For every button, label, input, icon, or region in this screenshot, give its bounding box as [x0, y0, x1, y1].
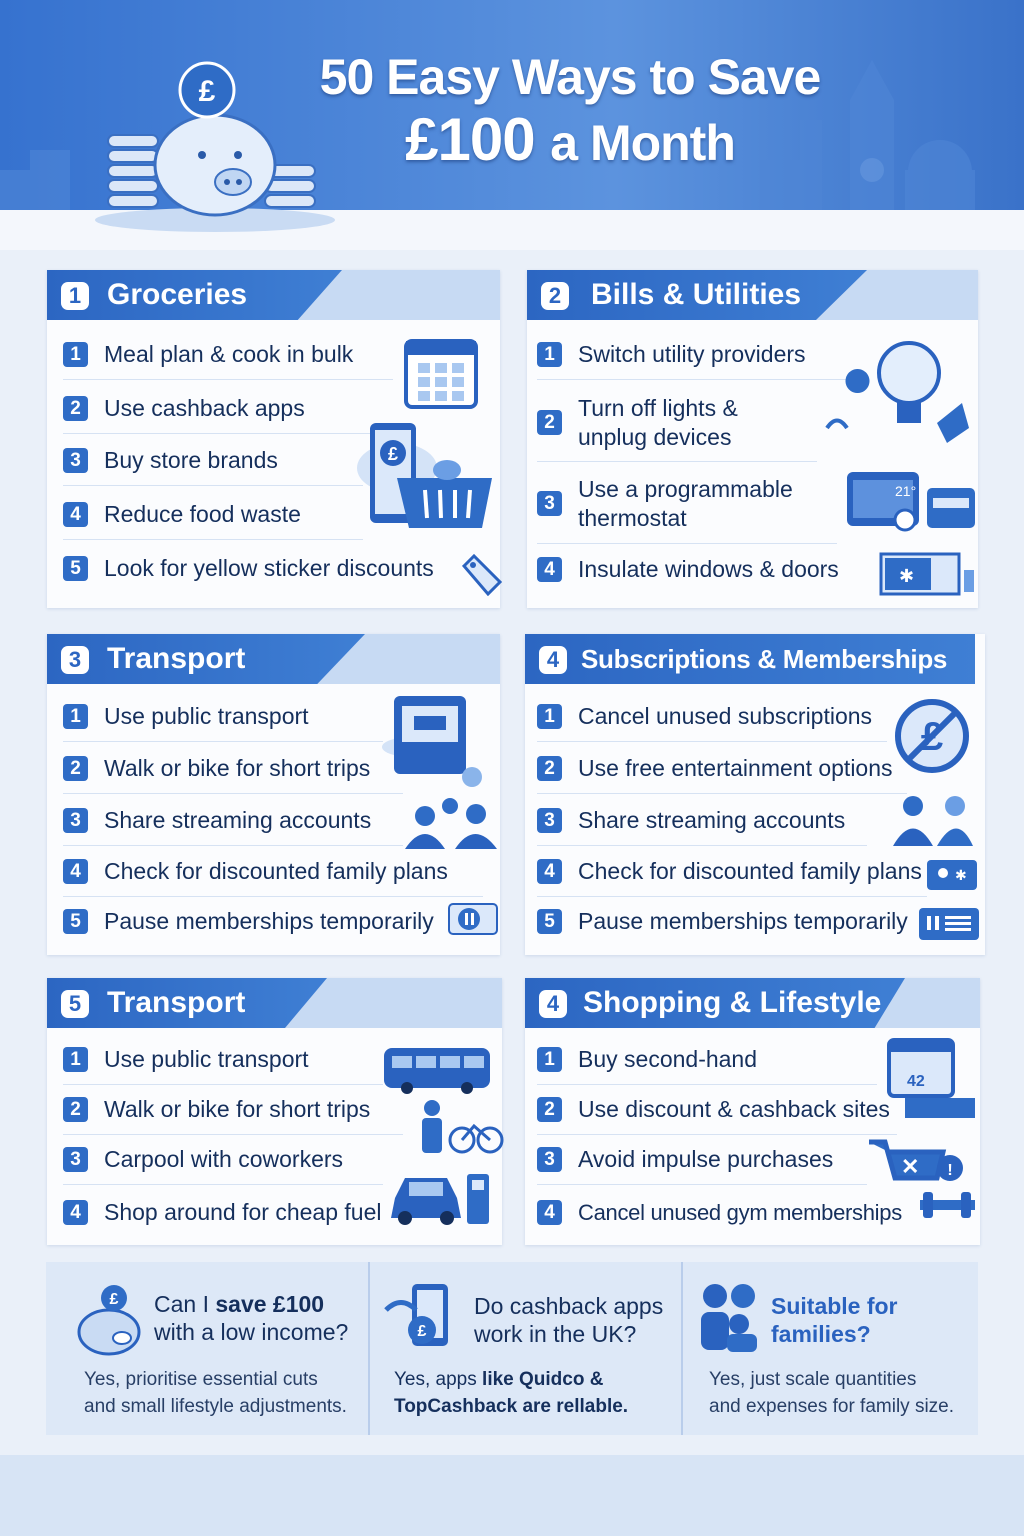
- list: transport: Pause memberships temporarily: [104, 908, 434, 934]
- icon: window: ✱: [899, 566, 914, 586]
- faq 3: and expenses for family size.: [709, 1396, 954, 1417]
- heading: transport 5: Transport: [107, 986, 245, 1019]
- list: transport: Share streaming accounts: [104, 807, 371, 833]
- faq 1: Can I save £100: [154, 1291, 324, 1317]
- list: groceries: 4: [70, 504, 81, 525]
- icon: list: [919, 908, 979, 940]
- icon: person bike: [422, 1100, 504, 1154]
- icon: phone and basket: £: [388, 444, 398, 464]
- list: transport 5: Shop around for cheap fuel: [104, 1198, 381, 1224]
- list: subscriptions: 2: [544, 758, 555, 779]
- list: groceries: 3: [70, 450, 81, 471]
- heading: subscriptions: Subscriptions & Memberships: [581, 644, 947, 674]
- list: subscriptions: Check for discounted family plans: [578, 858, 922, 884]
- panel: subscriptions: [525, 634, 985, 955]
- faq 3: [681, 1262, 978, 1435]
- list: shopping: [537, 1046, 902, 1225]
- list: transport: 5: [70, 910, 81, 932]
- list: transport: Walk or bike for short trips: [104, 755, 370, 781]
- icon: phone: [384, 1284, 448, 1346]
- list: transport 5: Use public transport: [104, 1046, 309, 1072]
- faq 1: and small lifestyle adjustments.: [84, 1396, 347, 1417]
- list: transport 5: 2: [70, 1099, 81, 1120]
- heading: shopping: Shopping & Lifestyle: [583, 986, 881, 1019]
- list: groceries: Buy store brands: [104, 447, 278, 473]
- list: groceries: Look for yellow sticker discounts: [104, 554, 434, 580]
- list: subscriptions: 5: [544, 910, 555, 932]
- list: transport 5: Carpool with coworkers: [104, 1146, 343, 1172]
- list: bills: 1: [544, 344, 555, 365]
- panel: transport: [47, 634, 500, 955]
- faq 2: work in the UK?: [474, 1321, 636, 1347]
- heading: shopping: [525, 978, 980, 1028]
- list: subscriptions: 3: [544, 810, 555, 831]
- icon: id card: ✱: [955, 867, 967, 883]
- list: bills: Turn off lights &: [578, 394, 738, 420]
- list: bills: [537, 341, 846, 582]
- icon: window: [880, 552, 974, 596]
- list: subscriptions: 1: [544, 706, 555, 727]
- list: transport 5: 1: [70, 1049, 81, 1070]
- faq 2: Yes, apps like Quidco &: [394, 1369, 603, 1390]
- list: shopping: 4: [544, 1202, 555, 1222]
- icon: thermostat: [847, 472, 975, 532]
- heading: transport: [47, 634, 500, 684]
- list: bills: Switch utility providers: [578, 341, 806, 367]
- icon: no pound: £: [921, 715, 943, 759]
- icon: phone and basket: [357, 423, 492, 528]
- icon: ticket machine: [382, 696, 482, 787]
- list: transport 5: Walk or bike for short trips: [104, 1096, 370, 1122]
- faq 3: families?: [771, 1321, 871, 1347]
- list: transport: 4: [70, 861, 81, 882]
- heading: groceries: 1: [69, 283, 81, 308]
- faq 1: Yes, prioritise essential cuts: [84, 1369, 318, 1390]
- icon: piggy bank with coins: £: [199, 75, 216, 108]
- faq 2: [368, 1262, 678, 1435]
- list: bills: 3: [544, 493, 555, 514]
- list: bills: 2: [544, 412, 555, 433]
- list: groceries: 5: [70, 558, 81, 578]
- icon: people: [405, 798, 497, 849]
- icon: cart with x: ✕: [901, 1154, 919, 1179]
- icon: cart with x: [869, 1140, 975, 1218]
- icon: no pound: [895, 699, 969, 773]
- heading: groceries: [47, 270, 500, 320]
- list: shopping: Use discount & cashback sites: [578, 1096, 890, 1122]
- icon: price tag: [462, 554, 502, 596]
- icon: phone: £: [418, 1323, 427, 1340]
- heading: shopping: 4: [547, 991, 559, 1016]
- header banner: [0, 0, 1024, 210]
- heading: transport: Transport: [107, 642, 245, 675]
- icon: bus: [384, 1048, 490, 1094]
- list: transport: Check for discounted family plans: [104, 858, 448, 884]
- icon: piggy bank with coins: [95, 62, 335, 232]
- list: groceries: [63, 341, 434, 581]
- light band: [0, 210, 1024, 250]
- list: transport: 1: [70, 706, 81, 727]
- list: shopping: 2: [544, 1099, 555, 1120]
- list: transport 5: [63, 1046, 403, 1225]
- icon: calendar: [404, 339, 478, 409]
- faq 3: Yes, just scale quantities: [709, 1369, 916, 1390]
- icon: cart with x: !: [947, 1162, 953, 1179]
- panel: FAQ: [46, 1262, 978, 1435]
- icon: family: [701, 1284, 757, 1352]
- list: transport 5: 4: [70, 1202, 81, 1222]
- heading: transport: 3: [69, 647, 81, 672]
- faq 2: TopCashback are rellable.: [394, 1396, 628, 1417]
- list: groceries: 1: [70, 344, 81, 365]
- panel: groceries: [47, 270, 500, 608]
- heading: groceries: Groceries: [107, 278, 247, 311]
- title: £100 a Month: [405, 106, 735, 173]
- list: transport: 3: [70, 810, 81, 831]
- list: groceries: 2: [70, 398, 81, 419]
- panel: shopping & lifestyle: [525, 978, 980, 1245]
- icon: light bulb: [825, 341, 969, 443]
- list: subscriptions: [537, 703, 927, 934]
- list: subscriptions: Pause memberships temporarily: [578, 908, 908, 934]
- list: bills: 4: [544, 558, 555, 580]
- icon: id card: [927, 860, 977, 890]
- heading: transport 5: 5: [69, 991, 81, 1016]
- heading: transport 5: [47, 978, 502, 1028]
- heading: subscriptions: 4: [547, 647, 559, 672]
- list: groceries: Reduce food waste: [104, 501, 301, 527]
- title: [320, 49, 821, 173]
- icon: receipt screen: 42: [907, 1073, 925, 1090]
- heading: bills: 2: [549, 283, 561, 308]
- heading: subscriptions: [525, 634, 975, 684]
- title: 50 Easy Ways to Save: [320, 49, 820, 105]
- list: subscriptions: Use free entertainment options: [578, 755, 893, 781]
- list: bills: thermostat: [578, 504, 687, 530]
- icon: thermostat: 21°: [895, 483, 916, 499]
- icon: piggy: £: [110, 1291, 119, 1308]
- faq 1: [78, 1285, 348, 1417]
- list: subscriptions: 4: [544, 861, 555, 882]
- icon: car and fuel: [391, 1174, 489, 1225]
- icon: piggy: [78, 1285, 140, 1356]
- list: groceries: Meal plan & cook in bulk: [104, 341, 353, 367]
- icon: people share: [893, 796, 973, 846]
- icon: pause: [448, 903, 498, 935]
- panel: transport 5: [47, 978, 502, 1245]
- panel: bills & utilities: [527, 270, 978, 608]
- skyline: [0, 140, 975, 210]
- list: transport: 2: [70, 758, 81, 779]
- list: shopping: 3: [544, 1149, 555, 1170]
- heading: bills: Bills & Utilities: [591, 278, 801, 311]
- icon: receipt screen: [887, 1038, 975, 1118]
- list: transport 5: 3: [70, 1149, 81, 1170]
- list: bills: Insulate windows & doors: [578, 556, 839, 582]
- faq 3: Suitable for: [771, 1293, 898, 1319]
- list: subscriptions: Cancel unused subscriptions: [578, 703, 872, 729]
- list: bills: unplug devices: [578, 424, 731, 450]
- list: shopping: Cancel unused gym memberships: [578, 1200, 902, 1224]
- list: transport: [63, 703, 483, 934]
- faq 2: Do cashback apps: [474, 1293, 663, 1319]
- list: bills: Use a programmable: [578, 476, 793, 502]
- list: transport: Use public transport: [104, 703, 309, 729]
- list: groceries: Use cashback apps: [104, 395, 305, 421]
- faq 1: with a low income?: [154, 1319, 348, 1345]
- list: shopping: Buy second-hand: [578, 1046, 757, 1072]
- list: subscriptions: Share streaming accounts: [578, 807, 845, 833]
- list: shopping: Avoid impulse purchases: [578, 1146, 833, 1172]
- list: shopping: 1: [544, 1049, 555, 1070]
- heading: bills: [527, 270, 978, 320]
